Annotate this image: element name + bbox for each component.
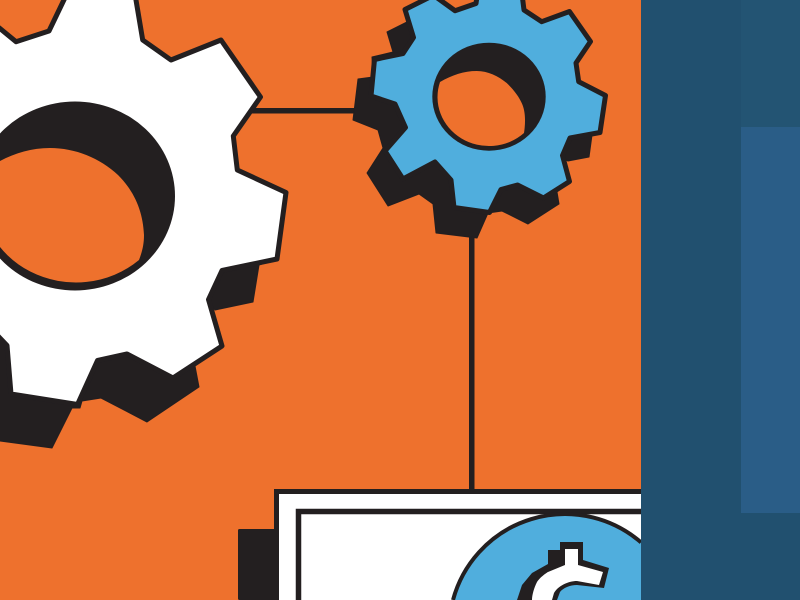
panel: dark blue sidebar bbox=[641, 0, 800, 600]
panel: upper muted block bbox=[741, 0, 800, 127]
icon: dollar sign bbox=[517, 542, 609, 600]
connector: vertical line from small gear to banknote bbox=[469, 230, 474, 492]
icon: large white gear bbox=[0, 0, 286, 448]
icon: small blue gear bbox=[353, 0, 606, 238]
icon: banknote with dollar coin bbox=[238, 492, 660, 600]
panel: lighter blue block bbox=[741, 127, 800, 513]
connector: horizontal line between gears bbox=[250, 108, 360, 114]
